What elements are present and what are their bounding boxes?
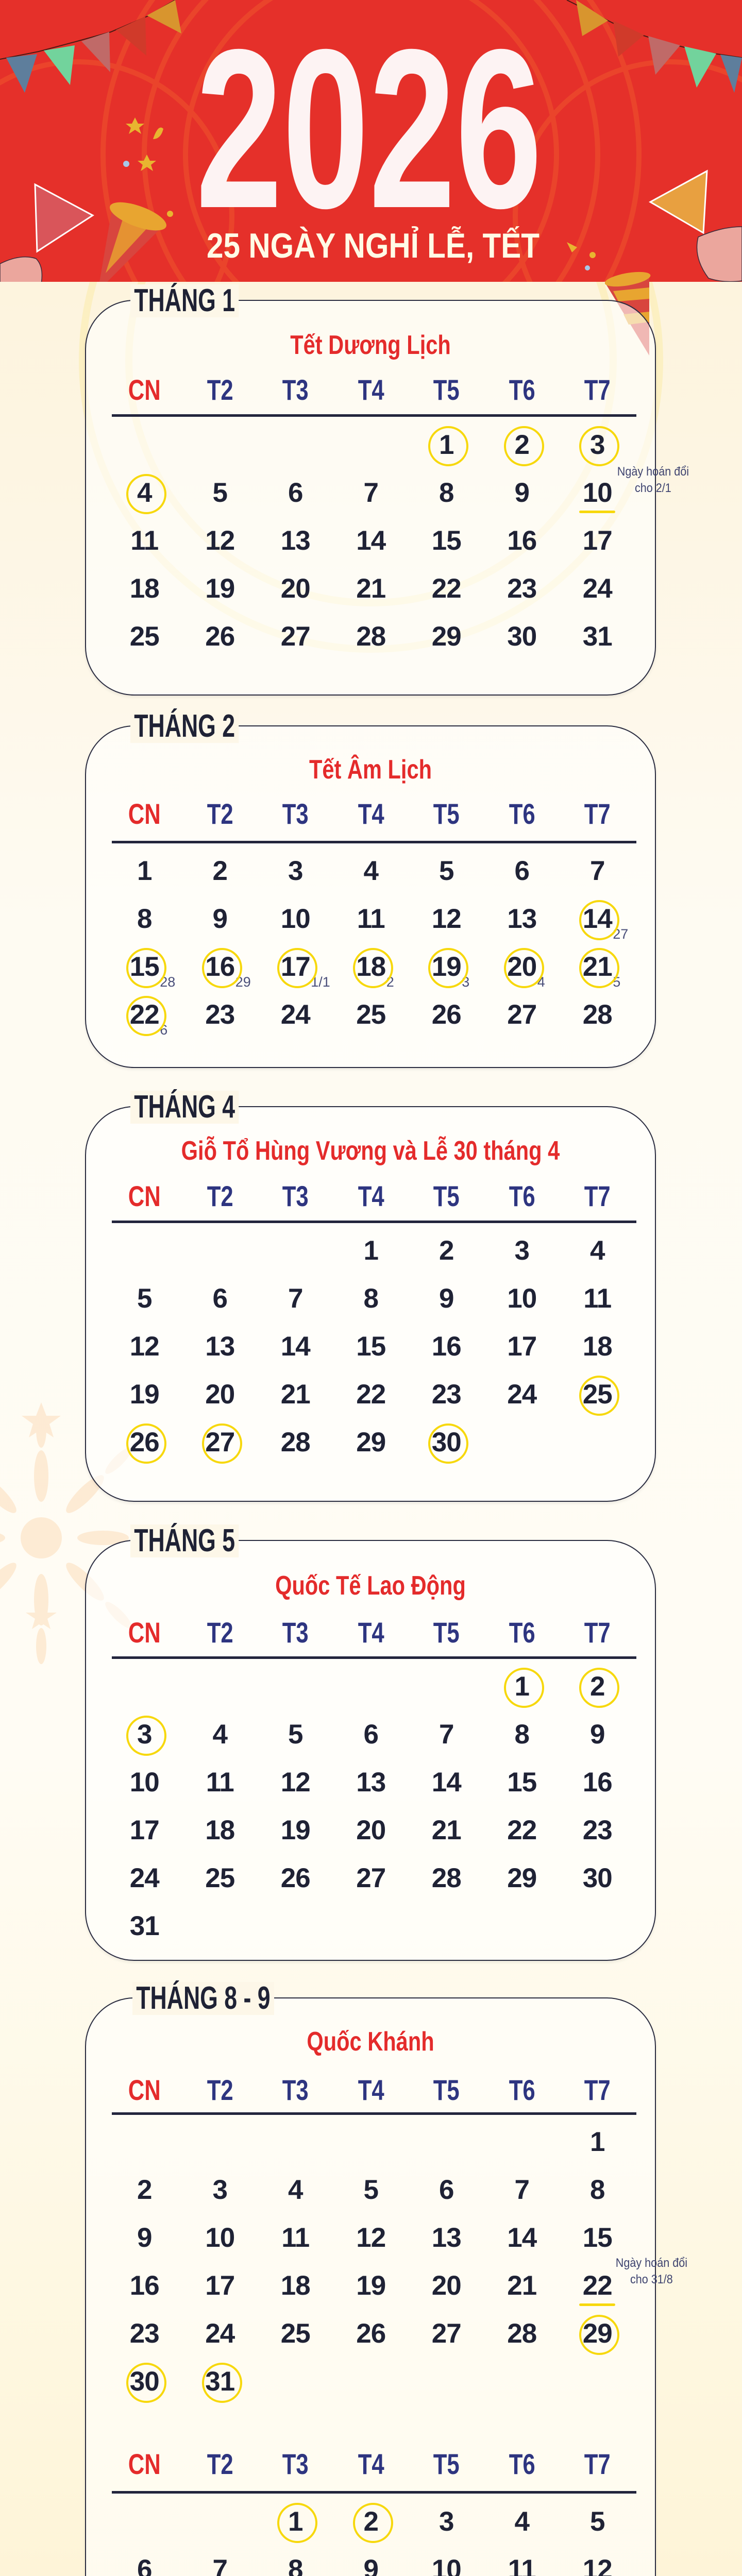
day grid: 6 <box>212 1283 227 1314</box>
day grid: 27 <box>205 1427 234 1458</box>
month title: THÁNG 2 <box>134 708 235 744</box>
day grid: 10 <box>130 1767 159 1798</box>
day grid: 8 <box>364 1283 378 1314</box>
day grid: 21 <box>281 1379 310 1410</box>
weekday header: August: T3 <box>282 2074 309 2106</box>
day grid: 10 <box>281 904 310 934</box>
day grid: 26 <box>130 1427 159 1458</box>
day grid: 20 <box>356 1815 385 1845</box>
day grid: 17 <box>130 1815 159 1845</box>
day grid: 19 <box>281 1815 310 1845</box>
day grid: 22 <box>356 1379 385 1410</box>
day grid: 12 <box>281 1767 310 1798</box>
day grid: 5 <box>212 478 227 508</box>
day grid: 28 <box>356 621 385 652</box>
day grid: 26 <box>205 621 234 652</box>
weekday header: September <box>128 2448 611 2480</box>
day grid: 5 <box>137 1283 151 1314</box>
month title: THÁNG 4 <box>134 1089 235 1125</box>
weekday header: August: T2 <box>207 2074 233 2106</box>
day grid: 28 <box>432 1863 461 1893</box>
day grid: 27 <box>613 926 628 942</box>
day grid: 24 <box>507 1379 536 1410</box>
day grid: 7 <box>590 856 604 886</box>
day grid: August: 11 <box>281 2223 309 2253</box>
day grid: 29 <box>507 1863 536 1893</box>
weekday header <box>128 798 611 830</box>
day grid: August: 15 <box>583 2223 612 2253</box>
day grid: August: 13 <box>432 2223 461 2253</box>
weekday header <box>128 1180 611 1212</box>
weekday header: T7 <box>584 798 611 830</box>
day grid: 3 <box>288 856 302 886</box>
day grid: 17 <box>281 952 310 982</box>
day grid: 11 <box>357 904 385 934</box>
day grid: 9 <box>212 904 227 934</box>
day grid: 1 <box>439 430 453 460</box>
day grid: 6 <box>288 478 302 508</box>
holiday name: Tết Âm Lịch <box>309 755 432 785</box>
day grid: 2 <box>386 974 394 989</box>
weekday header: T3 <box>282 1180 309 1212</box>
day grid: 28 <box>160 974 175 989</box>
day grid: 12 <box>432 904 461 934</box>
day grid: 21 <box>356 573 385 604</box>
day grid: September: 3 <box>439 2506 453 2537</box>
month title: THÁNG 5 <box>134 1523 235 1558</box>
day grid: 24 <box>130 1863 159 1893</box>
day grid: 26 <box>432 999 461 1030</box>
day grid: 9 <box>590 1719 604 1750</box>
day grid <box>126 1668 619 1941</box>
day grid: 3 <box>590 430 604 460</box>
weekday header: T5 <box>433 1180 460 1212</box>
day grid: 17 <box>583 526 612 556</box>
day grid: 14 <box>432 1767 461 1798</box>
day grid: September <box>137 2503 612 2576</box>
day grid: September: 4 <box>514 2506 529 2537</box>
day grid: August: 3 <box>212 2175 227 2205</box>
day grid: August: 16 <box>130 2270 159 2301</box>
day grid: August: 28 <box>507 2318 536 2349</box>
day grid: 12 <box>205 526 234 556</box>
day grid: 11 <box>583 1283 611 1314</box>
day grid: 2 <box>590 1671 604 1702</box>
day grid: 5 <box>613 974 620 989</box>
day grid: 20 <box>507 952 536 982</box>
weekday header: T3 <box>282 1616 309 1649</box>
day grid: 11 <box>130 526 158 556</box>
month title: THÁNG 8 - 9 <box>136 1980 271 2016</box>
day grid: 5 <box>288 1719 302 1750</box>
panel: Tháng 4 <box>85 1106 656 1502</box>
weekday header: T3 <box>282 798 309 830</box>
day grid: 24 <box>583 573 612 604</box>
weekday header: September: T7 <box>584 2448 611 2480</box>
day grid: August: 27 <box>432 2318 461 2349</box>
day grid: August: 10 <box>205 2223 234 2253</box>
day grid: 16 <box>432 1331 461 1362</box>
day grid: 7 <box>364 478 378 508</box>
panel: Tháng 8 - 9 <box>85 1997 656 2576</box>
holiday name: Quốc Khánh <box>307 2027 434 2057</box>
day grid: 18 <box>583 1331 612 1362</box>
day grid: 13 <box>281 526 310 556</box>
day grid: 30 <box>507 621 536 652</box>
weekday header: T5 <box>433 374 460 406</box>
day grid: 18 <box>356 952 385 982</box>
weekday header: September: CN <box>128 2448 161 2480</box>
day grid: 1/1 <box>311 974 330 989</box>
day grid: 16 <box>205 952 234 982</box>
weekday header: T6 <box>509 1616 535 1649</box>
weekday header: September: T5 <box>433 2448 460 2480</box>
day grid: 28 <box>583 999 612 1030</box>
day grid: 27 <box>507 999 536 1030</box>
weekday header: September: T3 <box>282 2448 309 2480</box>
day grid: 8 <box>514 1719 529 1750</box>
day grid: 10 <box>583 478 612 508</box>
day grid: 2 <box>439 1235 453 1266</box>
header banner <box>0 0 742 282</box>
day grid: September: 2 <box>364 2506 378 2537</box>
weekday header: T6 <box>509 798 535 830</box>
weekday header: T4 <box>358 1180 384 1212</box>
day grid: 23 <box>205 999 234 1030</box>
day grid <box>126 856 628 1038</box>
day grid: 29 <box>432 621 461 652</box>
day grid: 14 <box>281 1331 310 1362</box>
day grid: August: 25 <box>281 2318 310 2349</box>
glass right <box>650 171 707 233</box>
day grid: 11 <box>206 1767 234 1798</box>
holiday name: Tết Dương Lịch <box>290 330 451 360</box>
day grid: 15 <box>356 1331 385 1362</box>
popper right <box>567 242 648 290</box>
day grid: 3 <box>462 974 469 989</box>
day grid: 7 <box>288 1283 302 1314</box>
weekday header: T2 <box>207 374 233 406</box>
weekday header: CN <box>128 798 161 830</box>
day grid: 29 <box>235 974 251 989</box>
weekday header: T4 <box>358 374 384 406</box>
day grid: 31 <box>130 1911 159 1941</box>
weekday header: T4 <box>358 1616 384 1649</box>
weekday header: August: T4 <box>358 2074 384 2106</box>
day grid: August: 31 <box>205 2366 234 2397</box>
day grid: August: 20 <box>432 2270 461 2301</box>
day grid: 3 <box>137 1719 151 1750</box>
day grid: 29 <box>356 1427 385 1458</box>
day grid: 18 <box>205 1815 234 1845</box>
day grid: 5 <box>439 856 453 886</box>
weekday header: T2 <box>207 798 233 830</box>
day grid: August: 6 <box>439 2175 453 2205</box>
weekday header <box>128 374 611 406</box>
right popper overlapping banner edge <box>605 272 650 355</box>
year 2026: 2026 <box>196 3 542 256</box>
weekday header: CN <box>128 374 161 406</box>
weekday header: August: CN <box>128 2074 161 2106</box>
day grid: 2 <box>212 856 227 886</box>
day grid: 20 <box>205 1379 234 1410</box>
day grid: 3 <box>514 1235 529 1266</box>
day grid: 16 <box>583 1767 612 1798</box>
day grid <box>126 1235 619 1464</box>
day grid: 27 <box>356 1863 385 1893</box>
weekday header: August: T6 <box>509 2074 535 2106</box>
day grid: 19 <box>205 573 234 604</box>
day grid: 15 <box>130 952 159 982</box>
day grid: 23 <box>432 1379 461 1410</box>
note: swap day <box>616 2256 687 2286</box>
note: swap day: Ngày hoán đổi <box>617 465 689 479</box>
weekday header: September: T6 <box>509 2448 535 2480</box>
day grid: 22 <box>130 999 159 1030</box>
day grid <box>126 426 619 652</box>
day grid: August: 19 <box>356 2270 385 2301</box>
bunting right <box>567 0 742 93</box>
weekday header: T3 <box>282 374 309 406</box>
subtitle: 25 days: 25 NGÀY NGHỈ LỄ, TẾT <box>207 226 539 265</box>
day grid: 14 <box>356 526 385 556</box>
note: swap day: cho 2/1 <box>635 481 671 495</box>
day grid: 4 <box>590 1235 604 1266</box>
day grid: 21 <box>583 952 612 982</box>
weekday header: September: T2 <box>207 2448 233 2480</box>
day grid: 24 <box>281 999 310 1030</box>
day grid: 4 <box>212 1719 227 1750</box>
day grid: August: 23 <box>130 2318 159 2349</box>
day grid: 19 <box>130 1379 159 1410</box>
day grid: 8 <box>439 478 453 508</box>
day grid: August: 30 <box>130 2366 159 2397</box>
day grid: August: 7 <box>514 2175 529 2205</box>
hand right <box>697 227 742 282</box>
day grid: 15 <box>432 526 461 556</box>
day grid: 27 <box>281 621 310 652</box>
day grid: 2 <box>514 430 529 460</box>
day grid: 9 <box>514 478 529 508</box>
weekday header: T5 <box>433 1616 460 1649</box>
day grid: 9 <box>439 1283 453 1314</box>
day grid: August: 14 <box>507 2223 536 2253</box>
day grid: 25 <box>583 1379 612 1410</box>
day grid: 23 <box>507 573 536 604</box>
day grid: 15 <box>507 1767 536 1798</box>
day grid: August: 1 <box>590 2127 604 2157</box>
day grid: 1 <box>514 1671 529 1702</box>
day grid: 18 <box>130 573 159 604</box>
day grid: 12 <box>130 1331 159 1362</box>
weekday header: T6 <box>509 374 535 406</box>
hand left <box>0 257 42 318</box>
panel: Tháng 1 <box>85 300 656 696</box>
panel: Tháng 5 <box>85 1540 656 1961</box>
day grid: 30 <box>432 1427 461 1458</box>
day grid: August: 21 <box>507 2270 536 2301</box>
panel: Tháng 2 <box>85 725 656 1068</box>
day grid: August: 9 <box>137 2223 151 2253</box>
weekday header: T2 <box>207 1616 233 1649</box>
day grid: 20 <box>281 573 310 604</box>
day grid: 17 <box>507 1331 536 1362</box>
day grid: 25 <box>356 999 385 1030</box>
note: swap day <box>617 465 689 495</box>
day grid: 30 <box>583 1863 612 1893</box>
day grid: 4 <box>537 974 545 989</box>
day grid: 21 <box>432 1815 461 1845</box>
day grid: August: 2 <box>137 2175 151 2205</box>
day grid: 6 <box>514 856 529 886</box>
note: swap day: Ngày hoán đổi <box>616 2256 687 2270</box>
weekday header: CN <box>128 1180 161 1212</box>
day grid: August: 5 <box>364 2175 378 2205</box>
day grid: August: 18 <box>281 2270 310 2301</box>
day grid: September: 5 <box>590 2506 604 2537</box>
day grid: 7 <box>439 1719 453 1750</box>
day grid: 25 <box>130 621 159 652</box>
glass left <box>35 184 93 251</box>
day grid: 10 <box>507 1283 536 1314</box>
holiday name: Quốc Tế Lao Động <box>275 1571 466 1601</box>
day grid: August: 26 <box>356 2318 385 2349</box>
day grid: 28 <box>281 1427 310 1458</box>
weekday header: August: T5 <box>433 2074 460 2106</box>
day grid: 19 <box>432 952 461 982</box>
day grid: 16 <box>507 526 536 556</box>
day grid: 4 <box>364 856 378 886</box>
day grid: August: 29 <box>583 2318 612 2349</box>
day grid: 8 <box>137 904 151 934</box>
day grid: 14 <box>583 904 612 934</box>
day grid: 23 <box>583 1815 612 1845</box>
day grid: 4 <box>137 478 151 508</box>
day grid: August <box>126 2127 619 2403</box>
day grid: August: 8 <box>590 2175 604 2205</box>
day grid: 6 <box>160 1022 167 1038</box>
weekday header <box>128 1616 611 1649</box>
day grid: 22 <box>432 573 461 604</box>
weekday header: T7 <box>584 1180 611 1212</box>
month title: THÁNG 1 <box>134 283 235 318</box>
weekday header: T6 <box>509 1180 535 1212</box>
day grid: 26 <box>281 1863 310 1893</box>
weekday header: August: T7 <box>584 2074 611 2106</box>
day grid: August: 24 <box>205 2318 234 2349</box>
day grid: 13 <box>356 1767 385 1798</box>
day grid: August: 12 <box>356 2223 385 2253</box>
weekday header: September: T4 <box>358 2448 384 2480</box>
weekday header: T5 <box>433 798 460 830</box>
weekday header: T4 <box>358 798 384 830</box>
weekday header: T7 <box>584 1616 611 1649</box>
day grid: August: 17 <box>205 2270 234 2301</box>
day grid: 22 <box>507 1815 536 1845</box>
weekday header: CN <box>128 1616 161 1649</box>
day grid: 31 <box>583 621 612 652</box>
holiday name: Giỗ Tổ Hùng Vương và Lễ 30 tháng 4 <box>181 1136 560 1166</box>
weekday header: T2 <box>207 1180 233 1212</box>
weekday header: August <box>128 2074 611 2106</box>
day grid: 13 <box>205 1331 234 1362</box>
bunting left <box>0 0 181 93</box>
weekday header: T7 <box>584 374 611 406</box>
day grid: 6 <box>364 1719 378 1750</box>
day grid: 25 <box>205 1863 234 1893</box>
day grid: September: 1 <box>288 2506 302 2537</box>
party popper left <box>98 117 173 291</box>
day grid: August: 22 <box>583 2270 612 2301</box>
day grid: 1 <box>364 1235 378 1266</box>
day grid: August: 4 <box>288 2175 302 2205</box>
note: swap day: cho 31/8 <box>630 2273 673 2286</box>
day grid: 13 <box>507 904 536 934</box>
day grid: 1 <box>137 856 151 886</box>
